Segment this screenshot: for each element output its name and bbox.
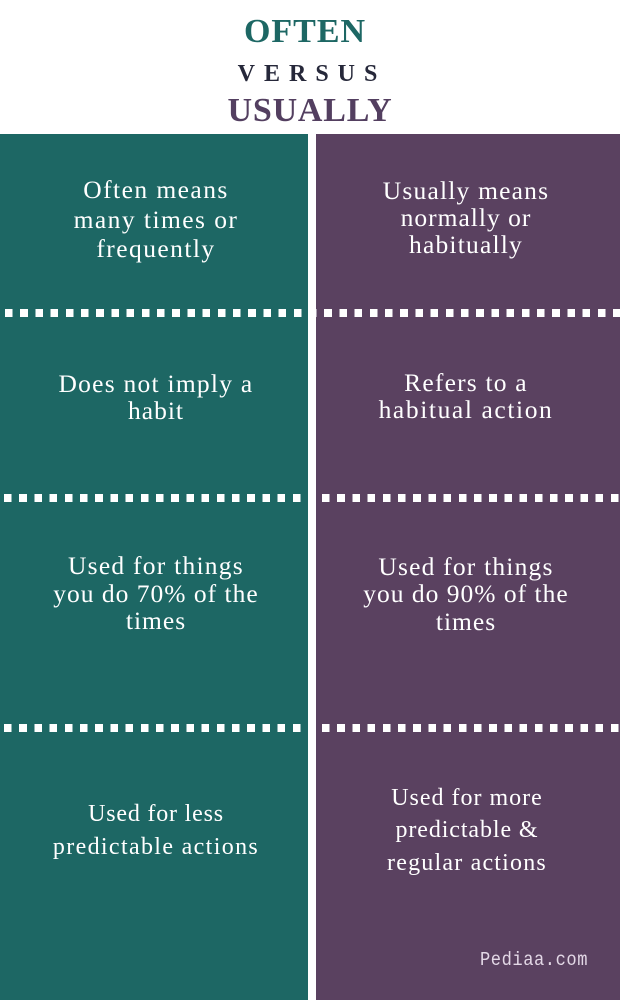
text: often less predictable bbox=[53, 801, 259, 860]
text: often habit: habit bbox=[128, 396, 184, 425]
text: usually more predictable: predictable & bbox=[396, 817, 538, 843]
text: usually habit: Refers to a bbox=[404, 368, 528, 397]
title: usually: USUALLY bbox=[228, 92, 392, 129]
divider row 3 left bbox=[4, 724, 304, 732]
divider row 2 left bbox=[4, 494, 304, 502]
title: often: OFTEN bbox=[244, 13, 366, 50]
text: usually habit bbox=[378, 368, 553, 424]
text: often 70 percent: Used for things bbox=[68, 551, 244, 580]
text: usually meaning: Usually means bbox=[383, 176, 549, 205]
text: often 70 percent bbox=[53, 551, 259, 635]
logo: Pediaa.com: Pediaa.com bbox=[480, 949, 588, 971]
text: often meaning: many times or bbox=[74, 204, 238, 234]
text: often meaning: frequently bbox=[96, 234, 216, 263]
text: usually 90 percent: you do 90% of the bbox=[363, 579, 569, 608]
divider row 1 right bbox=[316, 309, 620, 317]
text: usually 90 percent: Used for things bbox=[378, 552, 554, 581]
text: often meaning bbox=[74, 175, 238, 263]
text: usually meaning bbox=[383, 176, 549, 259]
text: often habit bbox=[59, 369, 253, 425]
text: usually more predictable: regular actions bbox=[387, 850, 547, 876]
panel: often column bbox=[0, 134, 308, 1000]
divider row 2 right bbox=[322, 494, 620, 502]
text: usually habit: habitual action bbox=[379, 395, 553, 424]
text: often meaning: Often means bbox=[83, 175, 229, 204]
panel: usually column bbox=[316, 134, 620, 1000]
divider row 1 left bbox=[5, 309, 306, 317]
text: often 70 percent: you do 70% of the bbox=[53, 578, 259, 608]
text: usually 90 percent bbox=[363, 552, 569, 636]
text: often less predictable: Used for less bbox=[88, 801, 224, 827]
text: often habit: Does not imply a bbox=[59, 369, 253, 398]
text: often less predictable: predictable actions bbox=[53, 834, 259, 860]
text: usually meaning: normally or bbox=[401, 203, 531, 232]
text: usually more predictable: Used for more bbox=[391, 785, 543, 811]
text: usually 90 percent: times bbox=[436, 607, 496, 636]
title: versus: VERSUS bbox=[238, 61, 386, 87]
text: usually more predictable bbox=[387, 785, 547, 876]
text: often 70 percent: times bbox=[126, 606, 186, 635]
divider row 3 right bbox=[322, 724, 620, 732]
text: usually meaning: habitually bbox=[409, 230, 523, 259]
